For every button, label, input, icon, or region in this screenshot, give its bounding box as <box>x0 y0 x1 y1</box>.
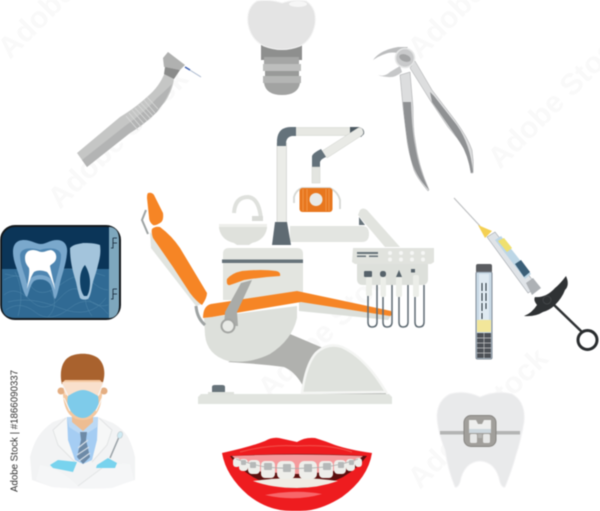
jaws <box>373 47 408 60</box>
seat body <box>204 306 297 362</box>
lamp stem <box>312 167 320 183</box>
armrest <box>227 270 280 285</box>
plunger <box>552 303 582 332</box>
watermark stock text: Adobe Stock | #1866090337 <box>10 370 20 492</box>
barrel <box>487 232 538 293</box>
grey neck <box>228 334 323 388</box>
armrest support <box>224 280 252 326</box>
icon: anesthetic ampoule <box>476 264 492 359</box>
mask <box>67 390 99 418</box>
gums <box>232 454 363 474</box>
handpieces on tray <box>364 269 419 297</box>
left handle <box>400 72 429 191</box>
icon: dental handpiece <box>77 52 201 167</box>
mouth <box>230 454 367 488</box>
cabinet <box>222 248 303 300</box>
backrest frame <box>150 232 203 306</box>
dental chair unit <box>142 127 434 404</box>
head bracket <box>142 210 148 234</box>
backrest cushion <box>152 227 207 305</box>
dental mirror <box>110 437 119 458</box>
instrument arm <box>358 208 400 247</box>
seat cushion <box>203 291 392 318</box>
syringe flange <box>524 276 568 316</box>
lamp pole <box>277 143 286 223</box>
icon: dental X-ray <box>1 226 120 319</box>
instrument tray <box>352 248 434 285</box>
right handle <box>410 61 473 173</box>
neck <box>72 410 93 431</box>
crossed arms <box>36 464 134 489</box>
pivot <box>396 48 414 68</box>
icon: dentist <box>30 354 135 489</box>
goggles <box>62 382 103 395</box>
faint background watermarks: Adobe Stock <box>42 62 195 215</box>
icon: dental implant <box>248 0 315 95</box>
icon: tooth with bracket <box>437 393 524 487</box>
base dome <box>302 345 386 393</box>
faint background watermarks: Adobe Stock <box>252 252 405 405</box>
premolar <box>70 243 100 300</box>
lamp joint <box>312 149 326 167</box>
molar <box>13 240 67 299</box>
headrest cushion <box>147 193 163 225</box>
lamp head <box>294 188 340 212</box>
lapels <box>53 418 112 462</box>
braces wire and brackets <box>236 459 358 468</box>
gloves <box>50 460 77 472</box>
faint background watermarks: Adobe Stock <box>402 342 555 495</box>
hair <box>61 354 104 385</box>
lamp arm <box>322 128 363 158</box>
sink <box>219 197 267 245</box>
pole column <box>272 222 291 245</box>
seat bracket <box>196 306 205 325</box>
upper pipe <box>294 128 352 136</box>
tie <box>77 432 90 464</box>
chair base plate <box>198 385 392 404</box>
icon: extraction forceps <box>373 47 473 191</box>
icon: syringe <box>454 198 597 350</box>
pipe end <box>350 127 364 137</box>
leg rest underside <box>299 300 391 320</box>
armrest pivot <box>222 320 234 332</box>
pipe elbow <box>277 127 296 146</box>
coat <box>30 417 135 488</box>
teeth <box>233 458 362 479</box>
hoses <box>368 285 424 327</box>
icon: smile with braces <box>222 438 372 511</box>
lips <box>222 438 372 511</box>
shirt <box>67 417 98 464</box>
head <box>63 374 102 420</box>
tray arm <box>290 226 369 242</box>
